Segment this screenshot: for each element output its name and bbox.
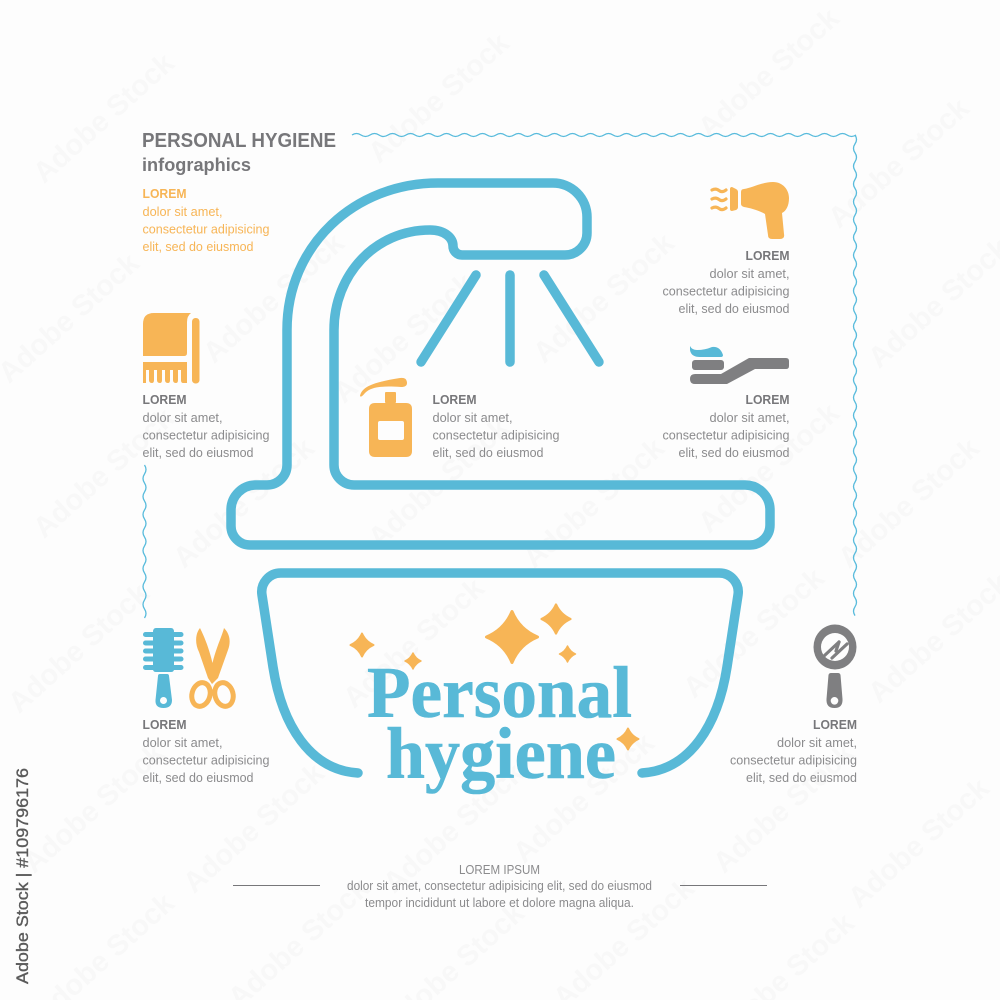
text block: brush and scissors: dolor sit amet, [142, 736, 222, 750]
footer text: dolor sit amet, consectetur adipisicing elit, sed do eiusmod [347, 879, 652, 893]
text block: brush and scissors: consectetur adipisicing [142, 754, 270, 768]
icon: hair dryer [712, 182, 789, 239]
watermark pattern: Adobe Stock [677, 562, 831, 705]
watermark pattern: Adobe Stock [167, 432, 321, 575]
basin outline [262, 573, 738, 773]
text block: toothbrush: dolor sit amet, [710, 411, 790, 425]
text block: hair dryer: elit, sed do eiusmod [678, 302, 790, 316]
text block: brush and scissors: LOREM [142, 718, 186, 732]
stock id side label: Adobe Stock | #109796176 [13, 768, 32, 984]
text block: mirror: elit, sed do eiusmod [746, 771, 857, 785]
icon: hand mirror [814, 624, 856, 708]
watermark pattern: Adobe Stock [337, 572, 491, 715]
text block: mirror: dolor sit amet, [777, 736, 857, 750]
text block: hair dryer: consectetur adipisicing [662, 284, 790, 298]
text block: soap: LOREM [432, 393, 476, 407]
watermark pattern: Adobe Stock [177, 757, 331, 900]
watermark pattern: Adobe Stock [2, 577, 156, 720]
icon: hair brush [143, 628, 184, 708]
faucet and sink outline [231, 183, 770, 545]
text block: toothbrush [662, 393, 790, 460]
title: infographics [142, 154, 251, 175]
text block: soap: elit, sed do eiusmod [432, 446, 544, 460]
footer text [347, 863, 652, 910]
watermark pattern: Adobe Stock [362, 412, 516, 555]
text block: towel [142, 393, 270, 460]
watermark pattern: Adobe Stock [27, 47, 181, 190]
text block: hair dryer: dolor sit amet, [710, 267, 790, 281]
watermark pattern: Adobe Stock [507, 727, 661, 870]
icon: soap dispenser [360, 378, 412, 457]
text block: brush and scissors: elit, sed do eiusmod [142, 771, 254, 785]
icon: scissors [189, 628, 236, 708]
central lettering: Personal hygiene: hygiene [386, 713, 616, 794]
text block: hair dryer [662, 249, 790, 316]
text block: orange intro: LOREM [142, 187, 186, 201]
watermark pattern: Adobe Stock [362, 27, 516, 170]
footer divider lines [233, 884, 767, 886]
text block: mirror: LOREM [813, 718, 857, 732]
watermark pattern: Adobe Stock [17, 737, 171, 880]
text block: towel: dolor sit amet, [142, 411, 222, 425]
watermark pattern: Adobe Stock [832, 432, 986, 575]
watermark pattern: Adobe Stock [27, 402, 181, 545]
text block: towel: LOREM [142, 393, 186, 407]
title: PERSONAL HYGIENE [142, 130, 336, 152]
central lettering: Personal hygiene: Personal [367, 652, 632, 733]
text block: soap [432, 393, 560, 460]
watermark pattern: Adobe Stock [692, 397, 846, 540]
watermark pattern: Adobe Stock [377, 757, 531, 900]
text block: hair dryer: LOREM [746, 249, 790, 263]
text block: orange intro: elit, sed do eiusmod [142, 240, 254, 254]
water spray lines [421, 275, 599, 362]
text block: mirror: consectetur adipisicing [730, 754, 857, 768]
text block: mirror [730, 718, 857, 785]
text block: orange intro [142, 187, 270, 254]
watermark pattern: Adobe Stock [527, 227, 681, 370]
text block: towel: consectetur adipisicing [142, 428, 270, 442]
text block: soap: consectetur adipisicing [432, 428, 560, 442]
central lettering: Personal hygiene [367, 652, 632, 794]
text block: towel: elit, sed do eiusmod [142, 446, 254, 460]
footer text: LOREM IPSUM [459, 863, 540, 877]
text block: toothbrush: LOREM [746, 393, 790, 407]
icon: towel [143, 313, 200, 384]
footer text: tempor incididunt ut labore et dolore magna aliqua. [365, 896, 634, 910]
text block: orange intro: consectetur adipisicing [142, 222, 270, 236]
text block: brush and scissors [142, 718, 270, 785]
text block: toothbrush: consectetur adipisicing [662, 428, 790, 442]
text block: toothbrush: elit, sed do eiusmod [678, 446, 790, 460]
title [142, 130, 336, 175]
watermark pattern: Adobe Stock [707, 737, 861, 880]
watermark pattern: Adobe Stock [197, 227, 351, 370]
watermark pattern: Adobe Stock [842, 772, 996, 915]
watermark pattern: Adobe Stock [327, 267, 481, 410]
watermark pattern: Adobe Stock [822, 92, 976, 235]
wavy frame [143, 134, 856, 618]
icon: toothbrush [690, 346, 789, 384]
watermark pattern: Adobe Stock [692, 2, 846, 145]
sparkles [350, 604, 638, 750]
text block: soap: dolor sit amet, [432, 411, 512, 425]
watermark pattern: Adobe Stock [517, 432, 671, 575]
text block: orange intro: dolor sit amet, [142, 205, 222, 219]
